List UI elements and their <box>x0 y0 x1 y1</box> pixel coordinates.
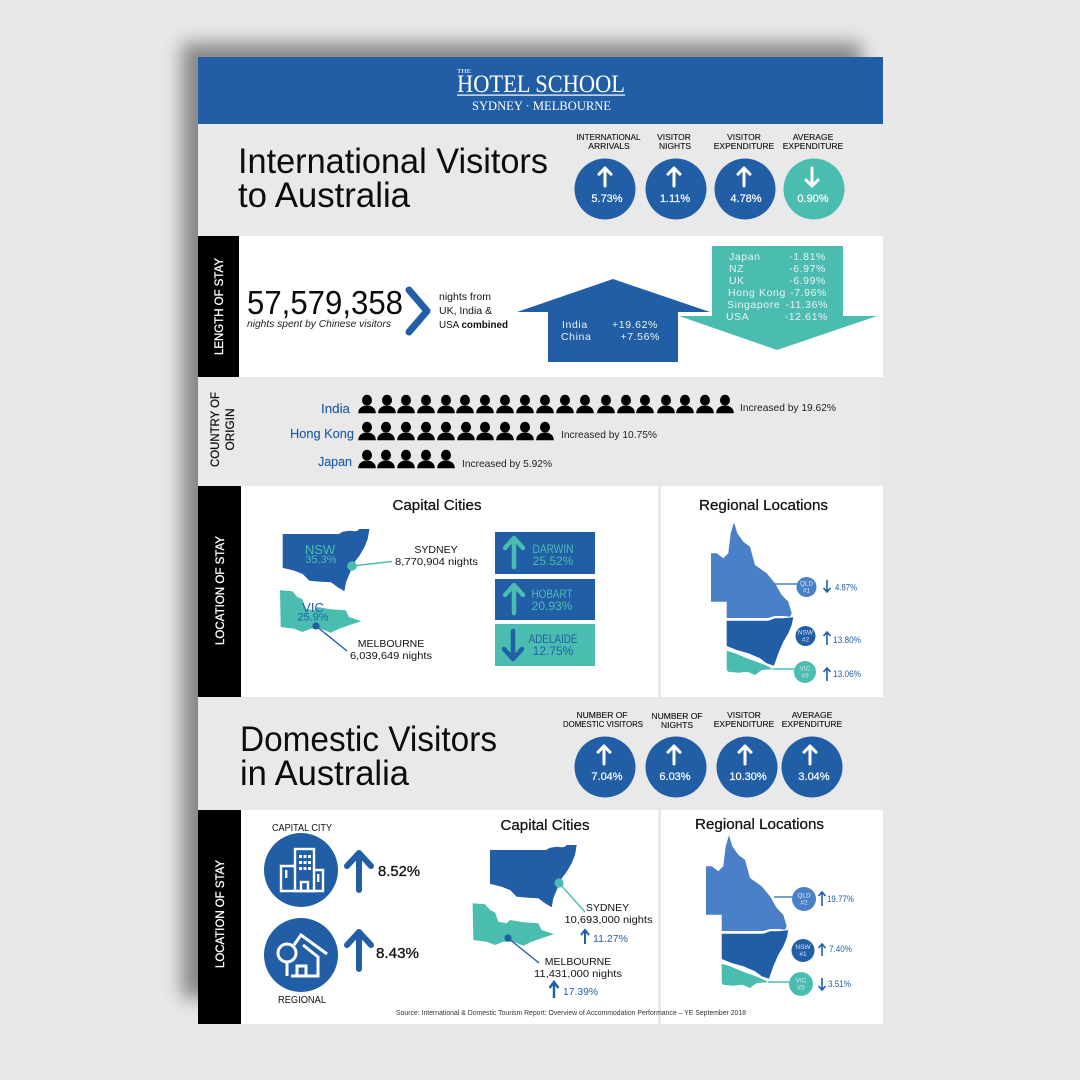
text: combined nights: USA combined <box>439 319 508 331</box>
box: Darwin <box>495 532 595 574</box>
label: domestic Melbourne: MELBOURNE <box>545 956 611 968</box>
label: domestic Melbourne: 17.39% <box>563 986 598 998</box>
panel: length of stay <box>198 236 877 377</box>
label: domestic Sydney <box>564 902 652 945</box>
icon: city buildings <box>264 833 338 907</box>
label: capital city: CAPITAL CITY <box>272 823 332 834</box>
row: Hong Kong: Hong Kong <box>290 426 354 441</box>
heading: country of origin: COUNTRY OF <box>208 392 222 467</box>
pin: NSW: #2 <box>802 636 809 644</box>
stat: visitor expenditure: 4.78% <box>730 193 762 205</box>
label: domestic Sydney: 11.27% <box>593 933 628 945</box>
stat: average expenditure: 0.90% <box>797 193 829 205</box>
label: domestic Melbourne <box>534 956 622 998</box>
row: Japan: Japan <box>318 454 352 469</box>
pin: VIC: #3 <box>801 672 809 680</box>
stat: domestic visitors <box>563 710 643 798</box>
stat: average expenditure: EXPENDITURE <box>783 141 844 151</box>
panel: domestic visitors <box>198 697 883 810</box>
row: Hong Kong: Increased by 10.75% <box>561 429 657 441</box>
pin: QLD <box>775 577 857 597</box>
stat: domestic visitor expenditure: VISITOR <box>727 710 761 720</box>
label: domestic Sydney: 10,693,000 nights <box>564 914 652 926</box>
box: Hobart: HOBART <box>532 587 573 601</box>
map: VIC <box>280 590 361 651</box>
title: domestic visitors: in Australia <box>240 754 410 793</box>
header banner with logo: HOTEL SCHOOL <box>457 71 625 98</box>
title: international visitors: International Visitors <box>238 142 548 181</box>
box: Adelaide: 12.75% <box>533 644 574 658</box>
icon: regional house and tree <box>264 918 338 992</box>
arrow: decreases: Japan <box>729 251 761 263</box>
heading: country of origin <box>208 392 237 467</box>
heading: country of origin: ORIGIN <box>223 408 237 450</box>
stat: number of nights: NUMBER OF <box>652 711 702 721</box>
box: Darwin: 25.52% <box>533 554 574 568</box>
stat: visitor nights: 1.11% <box>660 193 690 205</box>
stat: domestic average expenditure: AVERAGE <box>792 710 833 720</box>
map: domestic NSW <box>490 845 585 912</box>
label: Melbourne: 6,039,649 nights <box>350 650 432 662</box>
pin: NSW <box>796 626 861 646</box>
arrow: increases: +7.56% <box>620 331 660 343</box>
box: Adelaide <box>495 624 595 666</box>
pin: domestic VIC: 3.51% <box>828 979 851 989</box>
row: Japan: Increased by 5.92% <box>462 458 552 470</box>
pin: domestic NSW <box>792 939 852 962</box>
box: Darwin: DARWIN <box>532 542 574 556</box>
stat: international arrivals: INTERNATIONAL <box>576 132 641 142</box>
label: Sydney <box>395 544 478 568</box>
arrow: decreases: NZ <box>729 263 744 275</box>
stat: visitor nights: NIGHTS <box>659 141 691 151</box>
label: Melbourne <box>350 638 432 662</box>
page card background <box>198 57 883 1024</box>
stat: domestic visitors: NUMBER OF <box>576 710 628 720</box>
stat: visitor expenditure <box>714 132 776 220</box>
map: NSW: NSW <box>305 542 336 557</box>
stat: number of nights: NIGHTS <box>661 720 693 730</box>
pin: domestic VIC <box>768 972 851 996</box>
icon: chevron <box>409 290 427 332</box>
box: Hobart: 20.93% <box>532 599 573 613</box>
pin: NSW: 13.80% <box>833 635 861 645</box>
value: capital city: 8.52% <box>378 863 420 880</box>
map: VIC: VIC <box>302 600 324 615</box>
label: regional: REGIONAL <box>278 995 326 1006</box>
stat: average expenditure: AVERAGE <box>793 132 834 142</box>
pin: domestic QLD: #2 <box>800 900 808 906</box>
box: Hobart <box>495 579 595 620</box>
heading: domestic regional locations: Regional Locations <box>695 817 824 833</box>
stat: visitor nights: VISITOR <box>657 132 691 142</box>
stat: domestic visitors: 7.04% <box>591 771 623 783</box>
map: NSW: 35.3% <box>305 554 337 566</box>
source note: Source: International & Domestic Tourism Report: Overview of Accommodation Performance – YE September 2018 <box>396 1008 746 1017</box>
map: NSW <box>283 529 392 591</box>
panel: international location of stay <box>198 486 861 697</box>
label: Sydney: SYDNEY <box>414 544 458 556</box>
heading: regional locations: Regional Locations <box>699 498 828 514</box>
arrow: decreases: Hong Kong <box>728 287 786 299</box>
stat: nights by Chinese visitors: 57,579,358 <box>247 284 403 321</box>
stat: average expenditure <box>783 132 844 220</box>
panel: international location of stay: LOCATION OF STAY <box>213 536 227 645</box>
stat: visitor expenditure: VISITOR <box>727 132 761 142</box>
map: domestic VIC <box>473 903 554 963</box>
panel: length of stay: LENGTH OF STAY <box>212 258 226 355</box>
pin: VIC <box>773 661 861 683</box>
stat: number of nights <box>646 711 706 798</box>
row: India <box>321 395 836 416</box>
header banner with logo: THE <box>457 68 471 75</box>
arrow: decreases <box>679 246 877 350</box>
arrow: decreases: Singapore <box>727 299 780 311</box>
row: Japan <box>318 450 552 470</box>
pin: domestic QLD <box>774 887 854 911</box>
arrow: decreases: UK <box>729 275 745 287</box>
card drop shadow <box>182 43 861 998</box>
pin: NSW: NSW <box>798 630 814 636</box>
label: domestic Sydney: SYDNEY <box>586 902 629 914</box>
arrow: decreases: -6.99% <box>789 275 826 287</box>
panel: domestic location of stay <box>198 810 854 1024</box>
arrow: increases: China <box>561 331 591 343</box>
arrow: increases <box>517 279 710 362</box>
pin: QLD: QLD <box>800 580 813 588</box>
stat: visitor nights <box>646 132 706 220</box>
pin: QLD: #1 <box>803 588 810 594</box>
title: domestic visitors: Domestic Visitors <box>240 720 497 759</box>
label: Sydney: 8,770,904 nights <box>395 556 478 568</box>
panel: country of origin <box>198 377 883 486</box>
row: India: Increased by 19.62% <box>740 402 836 414</box>
stat: domestic average expenditure: EXPENDITURE <box>782 719 843 729</box>
stat: domestic visitor expenditure: EXPENDITURE <box>714 719 775 729</box>
stat: domestic visitor expenditure <box>714 710 778 798</box>
row: India: India <box>321 401 351 416</box>
heading: capital cities: Capital Cities <box>392 498 482 514</box>
arrow: increases: +19.62% <box>612 319 658 331</box>
stat: domestic visitor expenditure: 10.30% <box>729 771 767 783</box>
arrow: decreases: -7.96% <box>790 287 827 299</box>
panel: international visitors <box>198 124 883 236</box>
pin: domestic NSW: #1 <box>799 951 807 958</box>
row: Hong Kong <box>290 422 657 441</box>
arrow: decreases: -12.61% <box>785 311 828 323</box>
pin: domestic VIC: #3 <box>797 984 805 992</box>
arrow: capital city up <box>347 853 371 890</box>
pin: domestic VIC: VIC <box>796 978 807 984</box>
panel: domestic location of stay: LOCATION OF STAY <box>213 860 227 968</box>
title: international visitors <box>238 142 548 215</box>
text: combined nights: nights from <box>439 291 491 303</box>
label: Melbourne: MELBOURNE <box>358 638 424 650</box>
header banner with logo: SYDNEY · MELBOURNE <box>472 98 611 113</box>
pin: VIC: 13.06% <box>833 669 861 679</box>
pin: domestic QLD: QLD <box>797 892 811 900</box>
stat: international arrivals <box>574 132 641 220</box>
label: domestic Melbourne: 11,431,000 nights <box>534 968 622 980</box>
map: domestic regional states <box>706 835 788 988</box>
stat: domestic visitors: DOMESTIC VISITORS <box>563 719 643 729</box>
arrow: decreases: -11.36% <box>785 299 828 311</box>
arrow: increases: India <box>562 319 588 331</box>
pin: domestic QLD: 19.77% <box>827 894 854 904</box>
stat: international arrivals: ARRIVALS <box>588 141 630 151</box>
text: combined nights <box>439 291 508 331</box>
pin: domestic NSW: 7.40% <box>829 944 852 954</box>
stat: international arrivals: 5.73% <box>591 193 623 205</box>
box: Adelaide: ADELAIDE <box>528 632 578 646</box>
title: international visitors: to Australia <box>238 176 411 215</box>
stat: number of nights: 6.03% <box>659 771 691 783</box>
title: domestic visitors <box>240 720 497 793</box>
text: combined nights: UK, India & <box>439 305 492 317</box>
pin: QLD: 4.87% <box>835 582 857 592</box>
stat: visitor expenditure: EXPENDITURE <box>714 141 775 151</box>
arrow: decreases: -6.97% <box>789 263 826 275</box>
arrow: decreases: -1.81% <box>789 251 826 263</box>
map: VIC: 25.9% <box>297 612 329 624</box>
map: regional states <box>711 522 793 675</box>
pin: VIC: VIC <box>800 666 811 672</box>
header banner with logo <box>198 57 883 124</box>
stat: domestic average expenditure: 3.04% <box>798 771 830 783</box>
heading: domestic capital cities: Capital Cities <box>500 818 590 834</box>
stat: nights by Chinese visitors: nights spent by Chinese visitors <box>247 318 392 330</box>
pin: domestic NSW: NSW <box>795 944 811 951</box>
arrow: decreases: USA <box>726 311 749 323</box>
arrow: regional up <box>347 932 371 969</box>
value: regional: 8.43% <box>376 945 419 962</box>
stat: domestic average expenditure <box>782 710 843 798</box>
